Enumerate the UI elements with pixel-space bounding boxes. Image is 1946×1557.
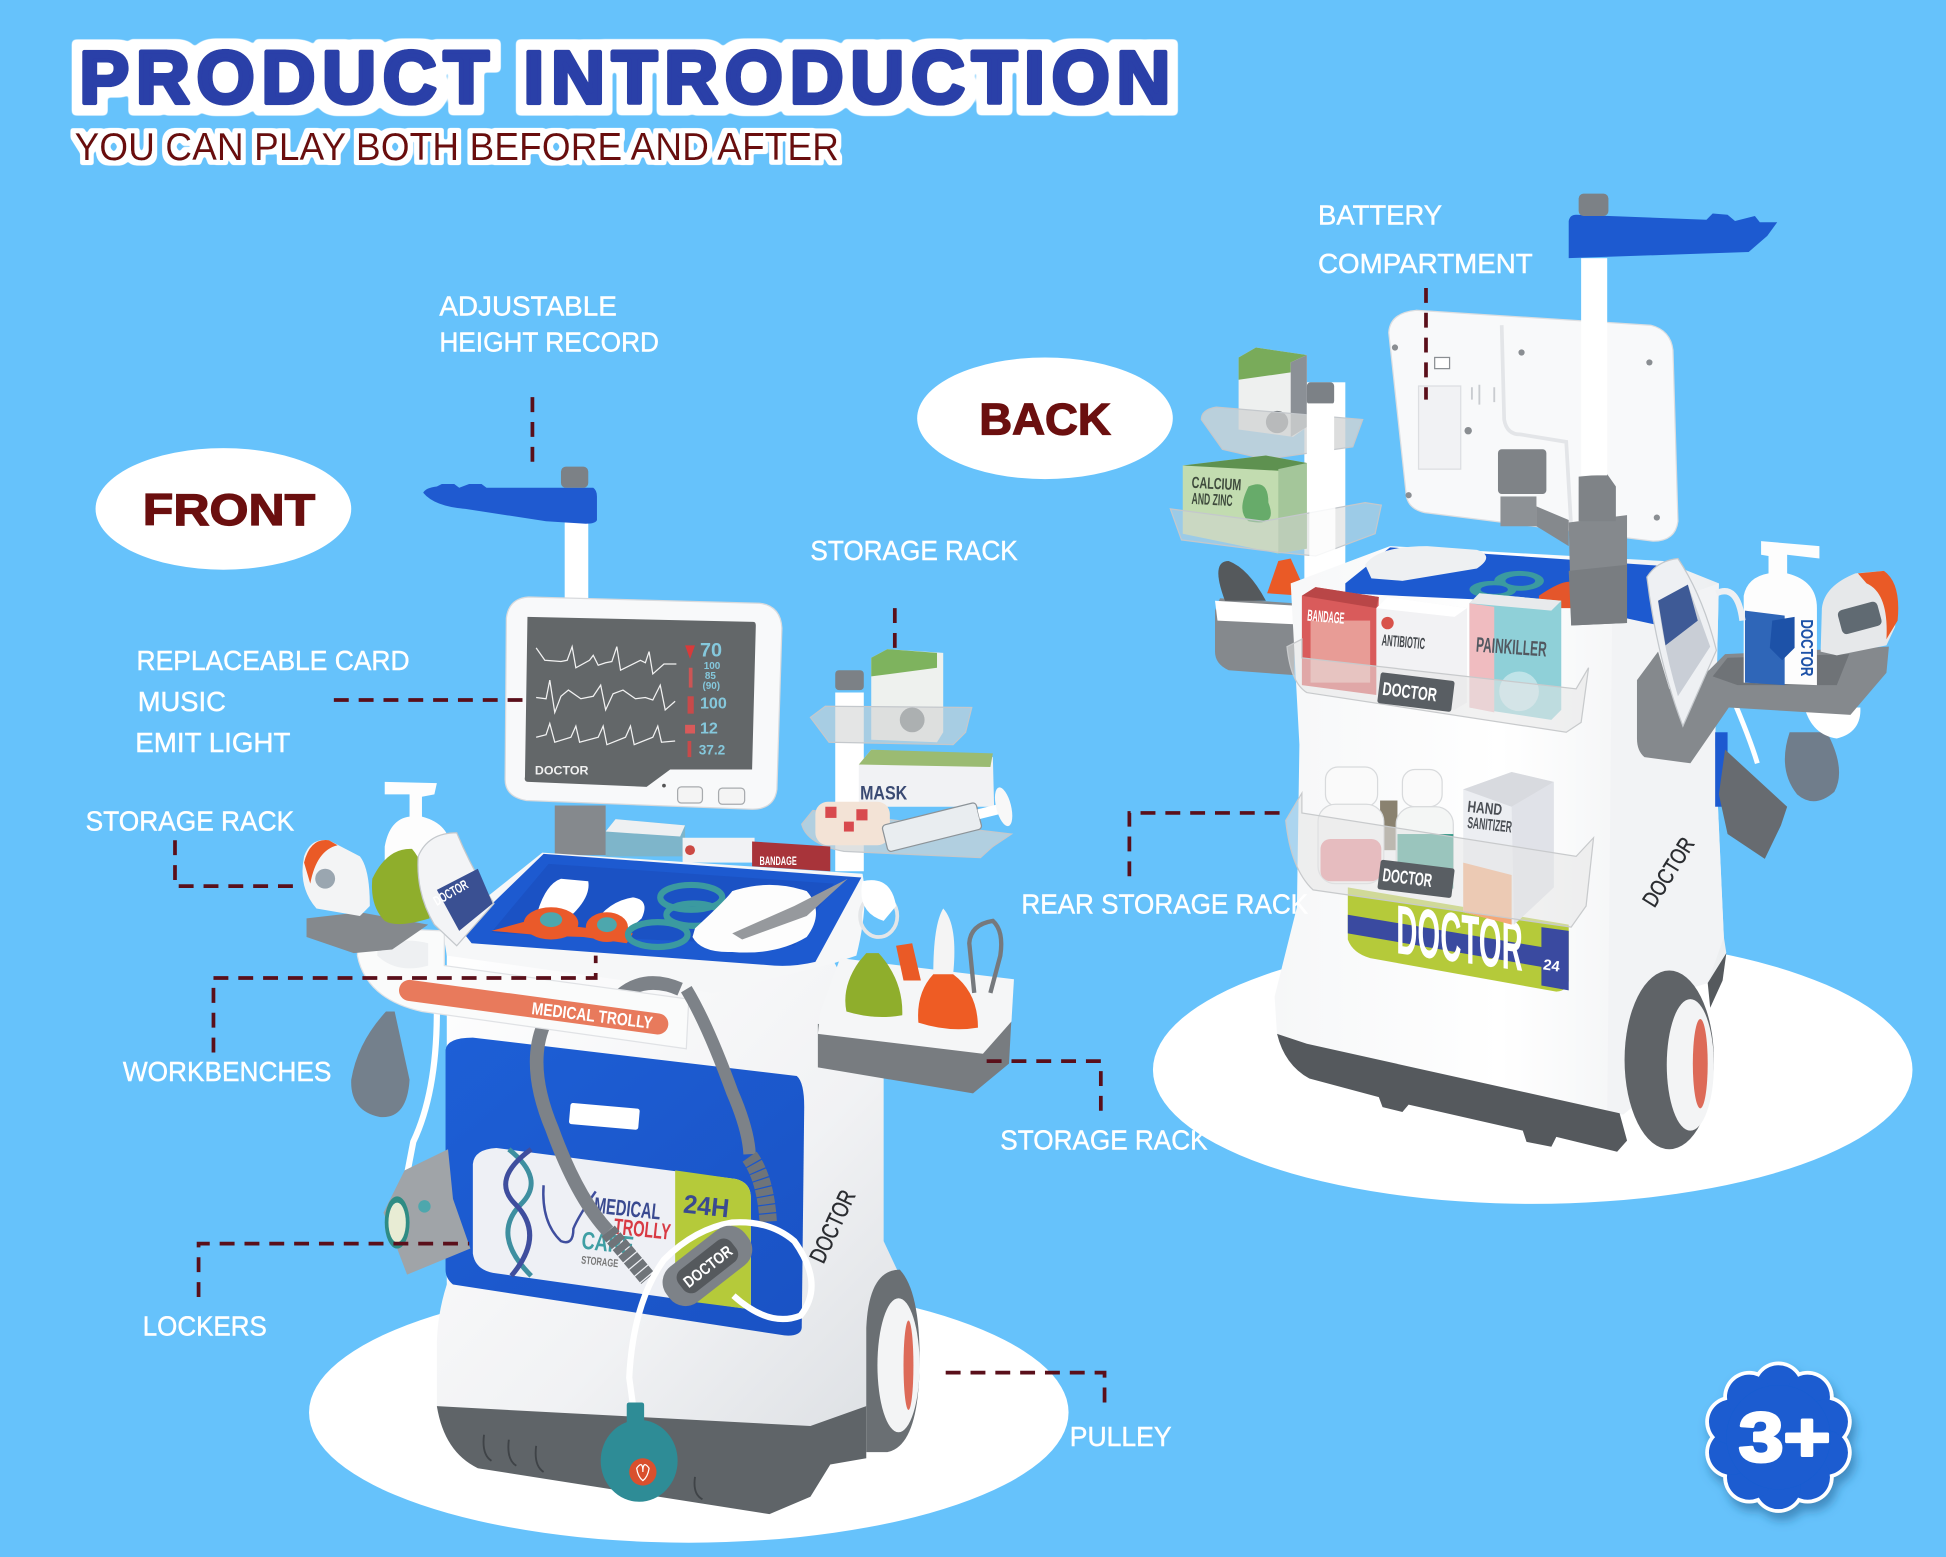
key ring: [860, 895, 897, 937]
leader: workbenches: [213, 956, 596, 1052]
floor disc: front: [309, 1282, 1069, 1543]
box: hand sanitizer: SANITIZER: [1467, 814, 1513, 837]
vital readouts: 70: [700, 640, 722, 662]
back: sticker: [1348, 887, 1569, 992]
text: and zinc: AND ZINC: [1191, 490, 1233, 510]
orange name plate: [410, 990, 658, 1024]
back: side panel: [1607, 583, 1724, 1115]
box: hand sanitizer: HAND: [1467, 798, 1503, 819]
back: side logo: DOCTOR: [1637, 833, 1699, 911]
front: stethoscope tube behind handle: [537, 983, 680, 1231]
label: storage rack lower: STORAGE RACK: [1000, 1124, 1208, 1155]
icon: syringe: [880, 786, 1016, 856]
tag: doctor y-piece: [655, 1218, 760, 1314]
tag: doctor: [1377, 860, 1455, 898]
text: medical: MEDICAL: [593, 1193, 662, 1225]
text: calcium and zinc box: CALCIUM: [1191, 474, 1242, 494]
text: 24: 24: [1542, 957, 1561, 976]
label: replaceable card, music, emit light: MUSIC: [138, 686, 226, 717]
monitor screen: [525, 617, 756, 787]
text: doctor clipboard: DOCTOR: [431, 877, 471, 909]
icon: bandage roll: [815, 802, 890, 845]
back: base: [1277, 1034, 1627, 1152]
label: pulley: PULLEY: [1070, 1421, 1172, 1452]
leader: adjustable height: [531, 397, 534, 469]
back: right tray and accessories: [1637, 541, 1898, 859]
kidney bowl: [693, 885, 816, 953]
label: replaceable card, music, emit light: REPLACEABLE CARD: [137, 645, 410, 676]
leader: pulley: [946, 1373, 1105, 1412]
label: lockers: LOCKERS: [143, 1310, 267, 1341]
box: painkiller: [1469, 593, 1561, 720]
label: adjustable height record: HEIGHT RECORD: [439, 326, 659, 357]
front: right tool tray: [818, 880, 1014, 1093]
bottle: teeth: [1318, 767, 1384, 884]
text: storage: STORAGE: [581, 1254, 619, 1270]
leader: lockers: [199, 1244, 469, 1297]
title: PRODUCT INTRODUCTION: [79, 36, 1170, 119]
front: workbench top: [443, 853, 865, 993]
back: monitor: [1389, 310, 1678, 541]
back: lower rear rack with bottles: [1286, 767, 1594, 927]
orange tool back: [896, 943, 921, 980]
back: top tray: [1345, 546, 1666, 627]
label: battery compartment: BATTERY: [1318, 200, 1442, 231]
front: hanging bulb and tube: [351, 1012, 437, 1174]
knife: [732, 879, 848, 940]
label: replaceable card, music, emit light: [135, 645, 410, 758]
front: flag pole: [423, 467, 597, 599]
front: drawer: [446, 1038, 804, 1336]
back trolley: [1170, 194, 1898, 1152]
vital readouts: 12: [700, 720, 718, 738]
box: bandage: [1302, 587, 1379, 695]
tag: doctor: [1377, 672, 1455, 712]
back: main body: [1275, 546, 1726, 1115]
label: battery compartment: [1318, 200, 1533, 279]
vital readouts: (90): [702, 681, 720, 692]
label: adjustable height record: ADJUSTABLE: [439, 290, 617, 321]
bottle: pill: [1396, 770, 1453, 889]
text: trolly: TROLLY: [613, 1214, 672, 1245]
front: stethoscope: [601, 989, 812, 1502]
blue tray: [463, 854, 861, 966]
badge: FRONT: [96, 448, 351, 570]
box: hand sanitizer: [1463, 772, 1554, 925]
front: monitor: [505, 597, 782, 809]
orange scissors: [491, 907, 633, 943]
front: main body: [437, 943, 902, 1430]
tag: doctor: DOCTOR: [1382, 864, 1434, 891]
label: workbenches: WORKBENCHES: [123, 1056, 331, 1087]
front: side logo: DOCTOR: [804, 1186, 860, 1267]
label card: [473, 1148, 751, 1309]
front: left tray and accessories: [303, 782, 494, 953]
icon: printed stethoscope: [543, 1185, 596, 1242]
ecg traces: [536, 647, 676, 745]
vital readouts: [685, 640, 727, 758]
tag: doctor: DOCTOR: [1381, 678, 1439, 705]
leader: rear storage rack: [1129, 813, 1286, 876]
vital readouts: 85: [705, 671, 716, 682]
vital readouts: 100: [700, 695, 727, 713]
text: mask: MASK: [860, 782, 908, 804]
subtitle: YOU CAN PLAY BOTH BEFORE AND AFTER: [74, 126, 839, 169]
front: monitor support: [555, 805, 606, 855]
text: doctor: DOCTOR: [535, 763, 588, 777]
teal scissors: [628, 885, 722, 947]
front: blood pressure cuff: [383, 1149, 470, 1275]
label: replaceable card, music, emit light: EMIT LIGHT: [135, 727, 291, 758]
front trolley: [303, 467, 1016, 1514]
badge: BACK: BACK: [979, 395, 1111, 444]
label: adjustable height record: [439, 290, 659, 357]
badge: BACK: [917, 357, 1173, 479]
floor disc: back: [1153, 936, 1912, 1204]
text: medical trolly: MEDICAL TROLLY: [531, 998, 654, 1033]
front: right storage racks: [802, 649, 1016, 871]
label: storage rack top: STORAGE RACK: [810, 535, 1018, 566]
back: wheel: [1625, 953, 1726, 1149]
leader lines: [175, 288, 1426, 1412]
text: 3+: 3+: [1739, 1398, 1831, 1476]
back: sticker: DOCTOR: [1396, 890, 1523, 986]
box: bandage: BANDAGE: [1306, 607, 1345, 628]
front: boxes behind monitor: [606, 819, 830, 871]
text: 24H: 24H: [682, 1189, 731, 1223]
tag: doctor y-piece: DOCTOR: [680, 1242, 736, 1292]
leader: replaceable card: [334, 699, 529, 702]
vital readouts: 37.2: [699, 743, 726, 758]
back: upper rear rack with boxes: [1287, 587, 1589, 732]
label: rear storage rack: REAR STORAGE RACK: [1021, 888, 1308, 919]
text: bottle label: DOCTOR: [1797, 619, 1817, 677]
text: care: CARE: [580, 1228, 635, 1260]
label: storage rack left: STORAGE RACK: [86, 805, 294, 836]
leader: right storage rack: [893, 608, 896, 658]
box: antibiotic: [1376, 597, 1467, 710]
chest piece: [601, 1402, 678, 1502]
front: wheel: [866, 1270, 920, 1452]
tweezers: [969, 921, 1001, 993]
box: antibiotic: ANTIBIOTIC: [1381, 631, 1426, 653]
back: grey arm and pole: [1498, 194, 1777, 626]
badge: age 3+: [1705, 1361, 1852, 1513]
leader: tool tray: [987, 1061, 1101, 1115]
white tool holders: [537, 879, 589, 913]
back: left storage racks: [1170, 348, 1381, 675]
icon: dna: [508, 1149, 531, 1276]
front: handle bar: [357, 928, 689, 1049]
leader: battery compartment: [1424, 288, 1427, 400]
label: battery compartment: COMPARTMENT: [1318, 248, 1533, 279]
box: painkiller: PAINKILLER: [1475, 634, 1547, 662]
text: bandage: BANDAGE: [760, 854, 797, 868]
orange horn tool: [918, 909, 978, 1029]
green otoscope: [845, 953, 902, 1017]
leader: left storage rack: [175, 840, 302, 886]
vital readouts: 100: [704, 661, 721, 672]
badge: FRONT: FRONT: [143, 486, 315, 535]
icon: stomach: [1242, 484, 1271, 523]
front: grey base: [437, 1406, 866, 1514]
